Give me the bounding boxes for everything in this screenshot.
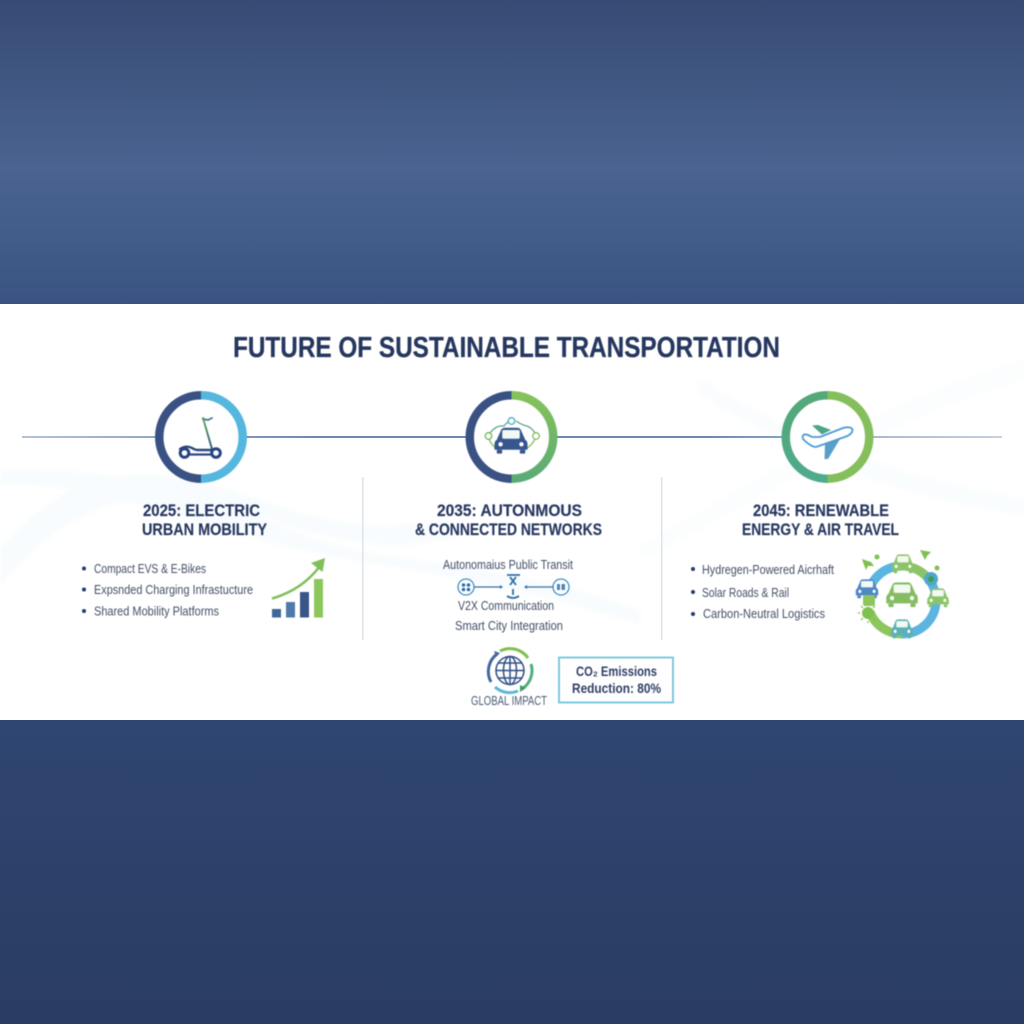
- bullet list: 2025: [82, 562, 253, 618]
- diagram: V2X connection icons: [458, 575, 569, 598]
- text: autonomous public transit: Autonomaius Public Transit: [443, 558, 573, 572]
- column dividers: [362, 477, 662, 640]
- title: FUTURE OF SUSTAINABLE TRANSPORTATION: [233, 332, 780, 364]
- icon: airplane in ring: [782, 391, 874, 483]
- panel: 2035 autonomous and connected networks: [415, 391, 602, 633]
- bullet list: 2025: Expsnded Charging Infrastucture: [94, 583, 253, 597]
- callout: CO2 reduction: CO₂ Emissions: [576, 663, 657, 679]
- label: global impact: GLOBAL IMPACT: [471, 694, 547, 708]
- bullet list: 2025: Shared Mobility Platforms: [94, 604, 219, 618]
- text: smart city integration: Smart City Integration: [455, 619, 563, 633]
- top navy band: [0, 0, 1024, 304]
- heading: 2045: ENERGY & AIR TRAVEL: [742, 520, 899, 539]
- icon: connected car in ring: [466, 391, 558, 483]
- bottom navy band: [0, 720, 1024, 1024]
- bullet list: 2025: Compact EVS & E-Bikes: [94, 562, 206, 576]
- bullet list: 2045: Hydregen-Powered Aicrhaft: [702, 563, 834, 577]
- heading: 2035: 2035: AUTONMOUS: [437, 501, 582, 520]
- heading: 2045: 2045: RENEWABLE: [753, 501, 889, 520]
- white content panel: [0, 304, 1024, 720]
- heading: 2025: [142, 501, 268, 539]
- icon: green vehicle cycle: [856, 550, 949, 638]
- bullet list: 2045: [691, 563, 834, 621]
- panel: 2045 renewable energy and air travel: [691, 391, 949, 638]
- timeline line: [22, 436, 1002, 438]
- icon: scooter in ring: [155, 391, 247, 483]
- heading: 2045: [742, 501, 899, 539]
- bullet list: 2045: Carbon-Neutral Logistics: [703, 607, 825, 621]
- callout: CO2 reduction: Reduction: 80%: [572, 680, 661, 696]
- bullet list: 2045: Solar Roads & Rail: [702, 586, 789, 600]
- heading: 2025: URBAN MOBILITY: [142, 520, 268, 539]
- heading: 2025: 2025: ELECTRIC: [143, 501, 260, 520]
- text: V2X communication: V2X Communication: [458, 599, 554, 613]
- bar chart with growth arrow: [272, 558, 325, 618]
- heading: 2035: & CONNECTED NETWORKS: [415, 520, 602, 539]
- callout: CO2 reduction: [559, 658, 673, 702]
- global impact badge: [471, 649, 547, 708]
- icon: globe with circular arrows: [488, 649, 532, 693]
- heading: 2035: [415, 501, 602, 539]
- panel: 2025 electric urban mobility: [82, 391, 325, 618]
